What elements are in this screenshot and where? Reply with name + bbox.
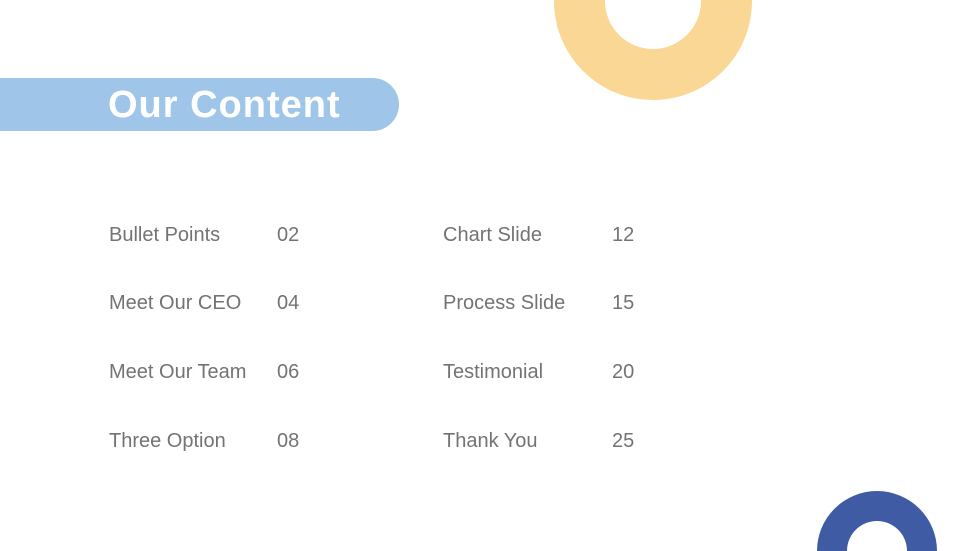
contents list: 25: [612, 430, 634, 452]
contents list: 06: [277, 361, 299, 383]
contents list: Bullet Points: [109, 224, 220, 246]
contents list: Three Option: [109, 430, 226, 452]
yellow ring: [554, 0, 752, 100]
contents list: Thank You: [443, 430, 538, 452]
contents list: 08: [277, 430, 299, 452]
contents list: 15: [612, 292, 634, 314]
title: Our Content: [108, 84, 341, 126]
contents list: Process Slide: [443, 292, 565, 314]
contents list: Testimonial: [443, 361, 543, 383]
contents list: 20: [612, 361, 634, 383]
contents list: 02: [277, 224, 299, 246]
contents list: Meet Our CEO: [109, 292, 241, 314]
title banner: [0, 78, 399, 131]
contents list: 04: [277, 292, 299, 314]
contents list: Meet Our Team: [109, 361, 246, 383]
contents list: Chart Slide: [443, 224, 542, 246]
navy ring: [817, 491, 937, 551]
contents list: 12: [612, 224, 634, 246]
contents list: [109, 224, 634, 452]
